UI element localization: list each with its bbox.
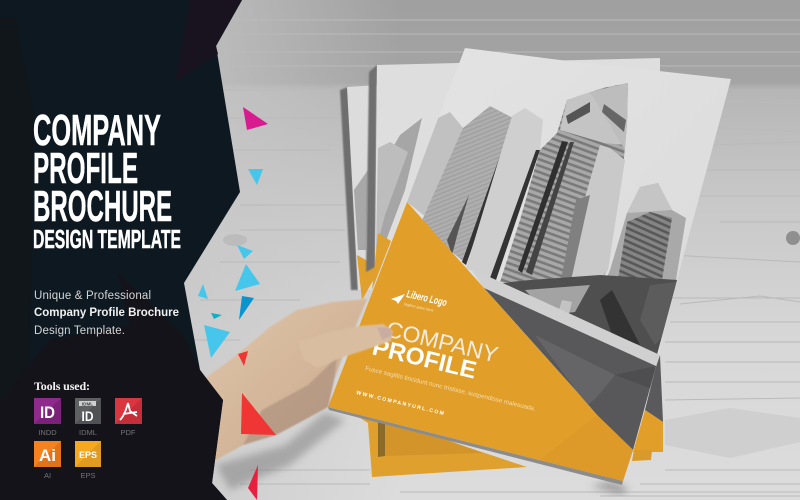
yellow panel	[328, 202, 633, 481]
hand holding brochure	[200, 299, 393, 460]
icon: paper plane	[391, 294, 405, 304]
middle tower	[420, 106, 517, 262]
thumb	[298, 324, 393, 368]
title: BROCHURE	[33, 182, 172, 231]
logo: Libero Logo	[405, 288, 448, 309]
cyan triangles	[198, 169, 263, 358]
dark side panel	[0, 0, 242, 500]
facet: bottom	[0, 273, 227, 500]
pale tower	[466, 108, 543, 282]
icon: INDD: INDD	[38, 428, 57, 437]
title: PROFILE	[33, 144, 138, 193]
palm and fingers	[200, 299, 367, 460]
tools used heading: Tools used:	[34, 379, 90, 393]
cover title: PROFILE	[370, 334, 479, 385]
thumbnail	[377, 327, 392, 340]
description: Unique & Professional	[34, 290, 151, 302]
lower palm shade	[243, 357, 337, 445]
third brochure	[340, 85, 380, 300]
icon: Ai: AI	[44, 471, 51, 480]
decorative triangles	[198, 107, 276, 500]
red triangles	[238, 351, 276, 500]
description: Design Template.	[34, 325, 125, 337]
cover title: COMPANY	[384, 317, 501, 367]
icon: INDD	[34, 398, 61, 437]
description	[34, 290, 179, 337]
icon: IDML: IDML	[82, 402, 93, 407]
cover page edge	[328, 407, 623, 485]
light strip	[470, 268, 660, 366]
second brochure	[340, 58, 663, 477]
title	[33, 106, 181, 254]
front brochure	[328, 48, 731, 485]
title: DESIGN TEMPLATE	[33, 224, 181, 254]
icon: INDD: ID	[40, 403, 55, 422]
icon: PDF: PDF	[120, 428, 136, 437]
icon: PDF	[115, 398, 142, 437]
icon: EPS: EPS	[80, 471, 96, 480]
right tower	[608, 183, 686, 352]
facet: left strip	[0, 17, 33, 400]
icon: IDML: IDML	[79, 428, 97, 437]
teal triangle	[211, 313, 222, 319]
icon: Ai: Ai	[39, 446, 56, 465]
left tower	[407, 112, 463, 216]
photo of city towers	[407, 83, 686, 357]
icon: EPS: EPS	[79, 450, 97, 460]
description: Company Profile Brochure	[34, 307, 179, 319]
title: COMPANY	[33, 106, 161, 155]
paper cover	[328, 48, 731, 481]
magenta triangle	[243, 107, 268, 130]
brochure shadow on table	[590, 482, 628, 494]
hand shadow	[216, 412, 345, 490]
cover url: WWW.COMPANYURL.COM	[356, 390, 444, 417]
grey band	[484, 288, 656, 450]
icon: EPS	[75, 441, 101, 480]
facet: top right	[175, 0, 242, 82]
main tower body	[500, 83, 628, 285]
back brochures	[340, 58, 663, 477]
icon: Ai	[34, 441, 61, 480]
cover title	[370, 317, 501, 385]
logo	[391, 288, 448, 313]
logo: tagline goes here	[404, 302, 434, 313]
blue triangle	[239, 296, 254, 320]
icon: IDML	[75, 398, 101, 437]
icon: IDML: ID	[82, 408, 94, 424]
lower street blocks	[502, 275, 677, 354]
cover tagline: Fusce sagittis tincidunt nunc tristisse, suspendisse malesuada.	[365, 365, 537, 413]
